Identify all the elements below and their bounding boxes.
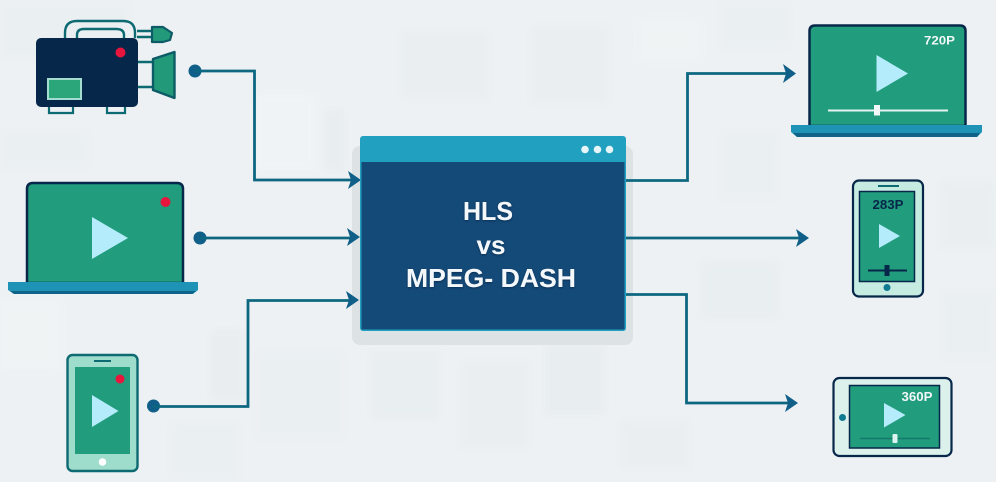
icon: 283p phone: 283P xyxy=(872,198,904,212)
icon: source phone xyxy=(68,355,138,471)
icon: 720p laptop xyxy=(791,26,982,137)
title text: HLS xyxy=(463,196,513,226)
icon: 360p tablet xyxy=(834,378,952,456)
title text xyxy=(406,196,576,293)
icon: 720p laptop: 720P xyxy=(924,34,955,48)
connector: laptop to window xyxy=(194,228,360,246)
connector: window to 283p phone xyxy=(626,229,809,247)
connector: window to 720p laptop xyxy=(626,64,796,180)
title text: MPEG- DASH xyxy=(406,263,576,293)
icon: 283p phone xyxy=(853,180,923,296)
connector: camera to window xyxy=(188,64,361,189)
window control dots xyxy=(581,146,613,153)
icon: video camera xyxy=(36,21,174,113)
icon: 360p tablet: 360P xyxy=(902,390,932,404)
title text: vs xyxy=(476,230,506,260)
connector: phone to window xyxy=(147,291,359,412)
icon: source laptop xyxy=(8,183,198,294)
panel: central window xyxy=(360,136,626,331)
panel: window backing plate xyxy=(352,146,633,345)
connector: window to 360p tablet xyxy=(626,294,798,412)
